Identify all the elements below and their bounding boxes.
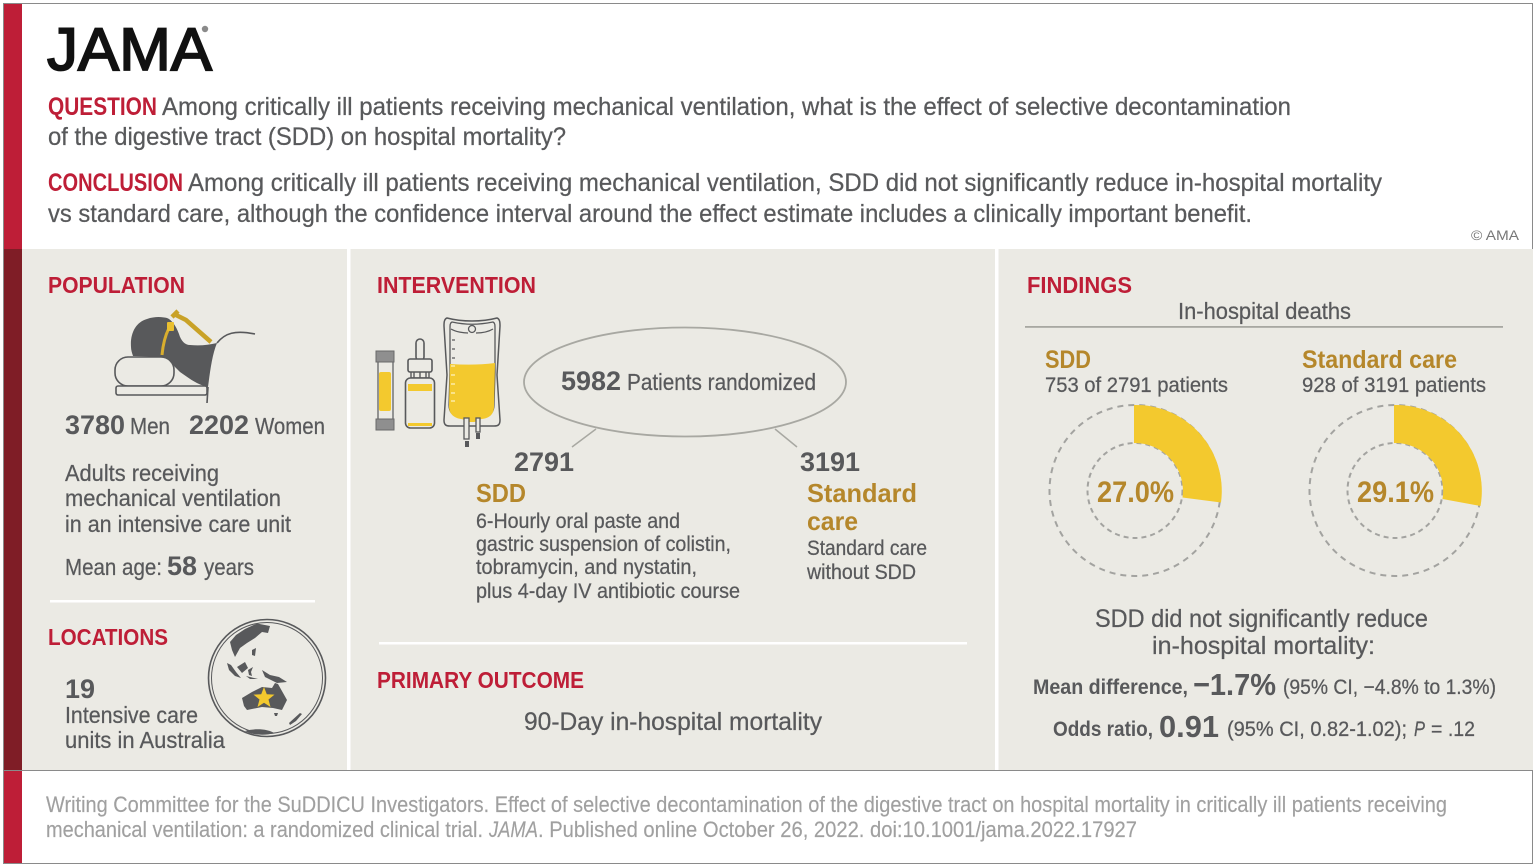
men and women counts: Women	[255, 413, 325, 439]
odds ratio	[1053, 709, 1475, 744]
odds ratio: (95% CI, 0.82-1.02);	[1227, 718, 1407, 741]
intervention heading: INTERVENTION	[377, 272, 536, 298]
mean difference: −1.7%	[1193, 667, 1276, 702]
mean age	[65, 551, 254, 581]
locations heading: LOCATIONS	[48, 624, 168, 650]
mean difference: Mean difference,	[1033, 676, 1188, 699]
ICU count: 19	[65, 674, 95, 704]
standard care donut	[1302, 346, 1486, 576]
conclusion text: CONCLUSION	[48, 169, 183, 197]
odds ratio: 0.91	[1159, 709, 1219, 744]
findings heading: FINDINGS	[1027, 272, 1132, 298]
mean age: 58	[167, 551, 197, 581]
standard care donut: 928 of 3191 patients	[1302, 373, 1486, 397]
SDD donut: SDD	[1045, 346, 1091, 374]
randomization ellipse: 5982	[561, 366, 621, 396]
icon: ventilated patient	[115, 311, 255, 403]
population description	[65, 460, 292, 537]
findings conclusion: in-hospital mortality:	[1152, 632, 1375, 660]
odds ratio: = .12	[1431, 718, 1475, 741]
odds ratio: Odds ratio,	[1053, 718, 1153, 741]
icon: oral paste tube	[376, 351, 394, 430]
standard care arm: 3191	[800, 447, 860, 477]
mean age: years	[204, 554, 254, 580]
SDD arm: 2791	[514, 447, 574, 477]
SDD arm: SDD	[476, 478, 526, 508]
panel: population	[48, 272, 326, 753]
standard care arm: care	[807, 506, 858, 536]
conclusion text: Among critically ill patients receiving mechanical ventilation, SDD did not significantly reduce in-hospital mortality	[188, 169, 1382, 197]
question text: QUESTION	[48, 93, 157, 121]
findings conclusion: SDD did not significantly reduce	[1095, 605, 1428, 633]
icon: dropper bottle	[406, 339, 434, 428]
question text	[48, 93, 1291, 151]
SDD arm: 6-Hourly oral paste and	[476, 509, 680, 533]
ICU count: Intensive care	[65, 702, 198, 728]
mean age: Mean age:	[65, 554, 162, 580]
SDD arm: tobramycin, and nystatin,	[476, 555, 697, 579]
SDD donut: 27.0%	[1097, 476, 1174, 509]
JAMA logo: JAMA	[47, 16, 212, 83]
ICU count: units in Australia	[65, 727, 225, 753]
question text: of the digestive tract (SDD) on hospital mortality?	[48, 123, 566, 151]
question text: Among critically ill patients receiving mechanical ventilation, what is the effect of selective decontamination	[162, 93, 1291, 121]
citation footer	[46, 792, 1447, 842]
standard care arm: Standard care	[807, 536, 927, 560]
primary outcome: PRIMARY OUTCOME	[377, 667, 584, 693]
conclusion text	[48, 169, 1382, 228]
panel: intervention	[376, 272, 967, 736]
primary outcome: 90-Day in-hospital mortality	[524, 708, 822, 736]
SDD donut: 753 of 2791 patients	[1045, 373, 1228, 397]
standard care arm: without SDD	[806, 560, 916, 584]
population heading: POPULATION	[48, 272, 185, 298]
standard care arm	[800, 447, 927, 584]
randomization ellipse: Patients randomized	[627, 369, 816, 395]
copyright: © AMA	[1471, 227, 1520, 243]
citation footer: mechanical ventilation: a randomized clinical trial.	[46, 817, 483, 842]
men and women counts: 2202	[189, 410, 249, 440]
in-hospital deaths subheading: In-hospital deaths	[1178, 298, 1351, 324]
SDD arm: gastric suspension of colistin,	[476, 532, 731, 556]
population description: Adults receiving	[65, 460, 219, 486]
SDD donut	[1045, 346, 1228, 576]
SDD arm: plus 4-day IV antibiotic course	[476, 579, 740, 603]
mean difference	[1033, 667, 1496, 702]
men and women counts: 3780	[65, 410, 125, 440]
citation footer: . Published online October 26, 2022. doi:10.1001/jama.2022.17927	[538, 817, 1137, 842]
primary outcome	[377, 667, 822, 736]
randomization ellipse	[524, 328, 846, 447]
standard care donut: Standard care	[1302, 346, 1457, 374]
population description: in an intensive care unit	[65, 511, 292, 537]
icon: IV bag	[444, 318, 500, 447]
conclusion text: vs standard care, although the confidence interval around the effect estimate includes a clinically important benefit.	[48, 200, 1252, 228]
population description: mechanical ventilation	[65, 485, 281, 511]
standard care donut: 29.1%	[1357, 476, 1434, 509]
odds ratio: P	[1414, 718, 1425, 741]
icon: globe with star on Australia	[208, 620, 326, 736]
mean difference: (95% CI, −4.8% to 1.3%)	[1283, 676, 1496, 699]
men and women counts: Men	[130, 413, 170, 439]
findings conclusion	[1095, 605, 1428, 660]
SDD arm	[476, 447, 740, 603]
men and women counts	[65, 410, 325, 440]
panel: findings	[1025, 272, 1503, 744]
citation footer: JAMA	[488, 817, 538, 842]
ICU count	[65, 674, 225, 753]
standard care arm: Standard	[807, 478, 917, 508]
